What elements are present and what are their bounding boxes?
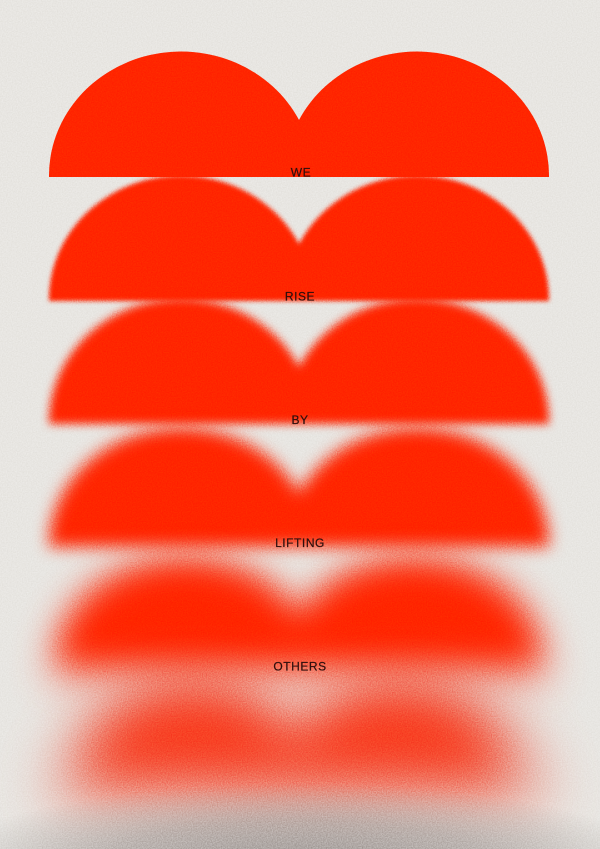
shape row 5: heavy blur bbox=[49, 559, 549, 684]
text: RISE: RISE bbox=[285, 290, 315, 304]
text: WE: WE bbox=[291, 166, 311, 180]
text: BY: BY bbox=[291, 413, 309, 427]
shape row 1: sharp bbox=[49, 52, 549, 177]
bottom grey fade bbox=[0, 780, 600, 849]
shape row 3: soft blur bbox=[49, 299, 549, 424]
shape row 4: medium blur bbox=[49, 428, 549, 547]
shape row 2: slight blur bbox=[49, 176, 549, 301]
text: LIFTING: LIFTING bbox=[275, 536, 325, 550]
shape row 6: dissolving blur bbox=[49, 683, 549, 808]
text: OTHERS: OTHERS bbox=[273, 660, 327, 674]
